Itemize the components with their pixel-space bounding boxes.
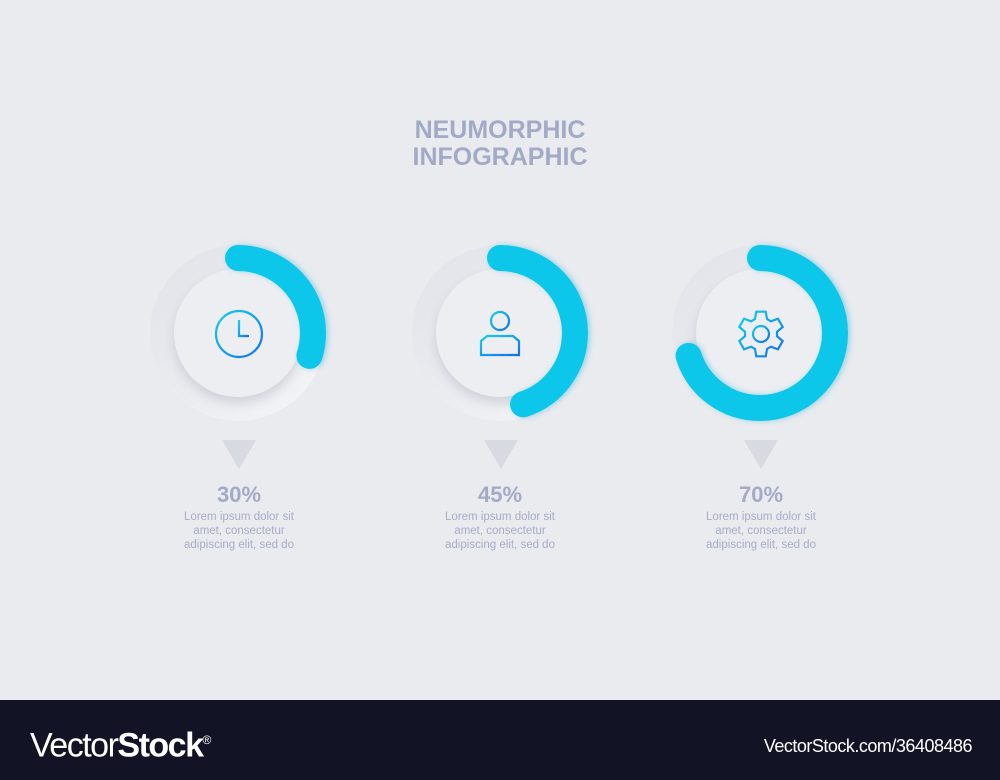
- text block 1: Lorem ipsum dolor sit: [184, 511, 294, 523]
- arrow: pointer 3: [744, 440, 778, 469]
- gauge 2: 45%: [412, 245, 588, 421]
- title: [412, 116, 588, 171]
- icon: gear: [739, 312, 783, 356]
- text block 2: Lorem ipsum dolor sit: [445, 511, 555, 523]
- icon: person: [481, 312, 519, 355]
- text block 3: Lorem ipsum dolor sit: [706, 511, 816, 523]
- footer url: VectorStock.com/36408486: [764, 736, 972, 756]
- arrow: pointer 1: [222, 440, 256, 469]
- footer logo: VectorStock®: [30, 726, 210, 764]
- text block 1: adipiscing elit, sed do: [184, 539, 294, 551]
- text block 3: [706, 511, 816, 551]
- arrow: pointer 2: [484, 440, 518, 469]
- text block 2: amet, consectetur: [454, 525, 546, 537]
- text block 3: adipiscing elit, sed do: [706, 539, 816, 551]
- title: NEUMORPHIC: [415, 116, 585, 144]
- label: 30%: 30%: [217, 482, 261, 507]
- text block 3: amet, consectetur: [715, 525, 807, 537]
- text block 2: [445, 511, 555, 551]
- footer: [0, 700, 1000, 780]
- text block 1: amet, consectetur: [193, 525, 285, 537]
- title: INFOGRAPHIC: [412, 143, 588, 171]
- text block 1: [184, 511, 294, 551]
- label: 70%: 70%: [739, 482, 783, 507]
- label: 45%: 45%: [478, 482, 522, 507]
- gauge 1: 30%: [150, 245, 326, 421]
- icon: clock: [216, 311, 262, 357]
- gauge 3: 70%: [672, 245, 848, 421]
- text block 2: adipiscing elit, sed do: [445, 539, 555, 551]
